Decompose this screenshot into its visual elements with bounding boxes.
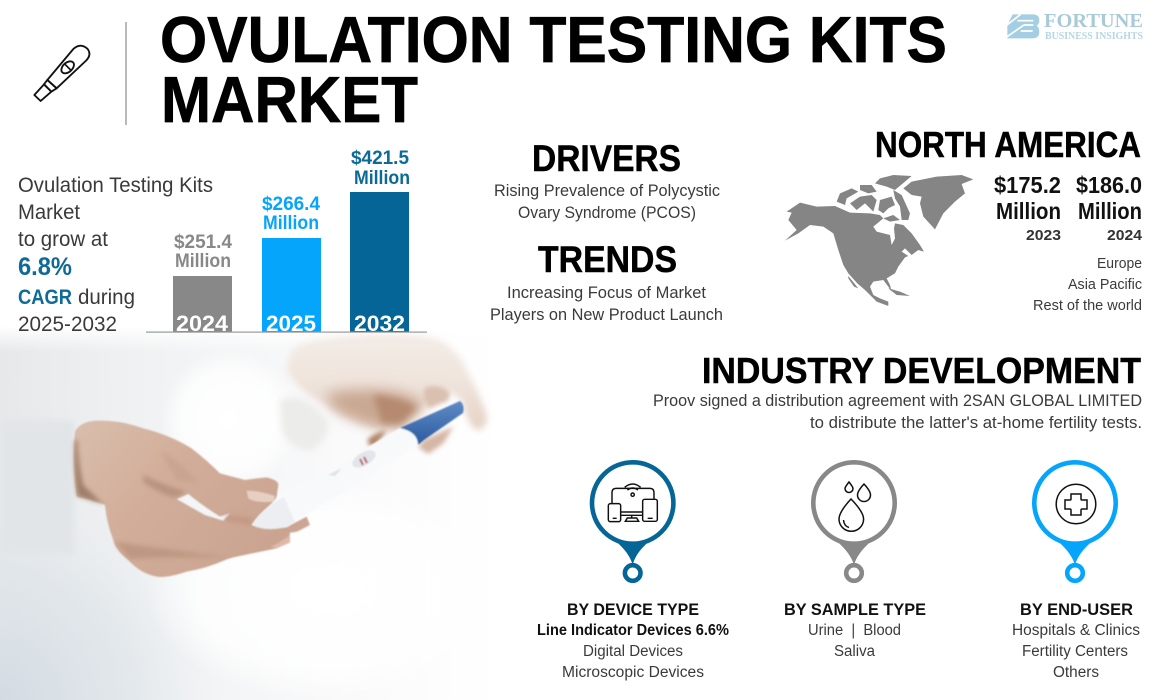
segment: by end-user: BY END-USER <box>1020 600 1133 619</box>
value: 2024: $186.0 <box>1076 172 1142 198</box>
bar: 2025: Million <box>263 213 319 234</box>
bar: 2025 <box>262 194 321 336</box>
pin: by sample type <box>813 462 895 581</box>
segment: by sample type: BY SAMPLE TYPE <box>784 600 926 619</box>
bar: 2024: 2024 <box>176 311 229 336</box>
panel: trends: Players on New Product Launch <box>490 306 723 324</box>
segment: by end-user: Others <box>1053 664 1099 681</box>
panel: drivers: Ovary Syndrome (PCOS) <box>518 204 696 222</box>
panel: industry development: to distribute the latter's at-home fertility tests. <box>810 414 1142 432</box>
value: 2023: $175.2 <box>994 172 1061 198</box>
panel: trends: TRENDS <box>538 239 677 280</box>
title: OVULATION TESTING KITS <box>160 3 947 76</box>
bar: 2032 <box>350 148 410 336</box>
segment: by sample type <box>784 600 926 660</box>
value: 2024 <box>1076 172 1143 244</box>
icon: connected devices <box>608 484 657 522</box>
bar chart: market size by year <box>146 148 427 336</box>
panel: industry development <box>653 350 1142 432</box>
title: MARKET <box>161 63 418 136</box>
photo: hands holding an ovulation test stick <box>0 326 500 700</box>
segment: by device type: Digital Devices <box>583 643 683 660</box>
segment: by end-user <box>1012 600 1140 681</box>
value: 2024: Million <box>1078 198 1142 224</box>
segment: by end-user: Hospitals & Clinics <box>1012 622 1140 639</box>
bar: 2032: Million <box>354 168 410 189</box>
panel: North America <box>875 124 1143 244</box>
list: other regions: Asia Pacific <box>1068 276 1142 293</box>
list: other regions: Rest of the world <box>1033 297 1142 314</box>
panel: drivers: DRIVERS <box>532 138 681 179</box>
bar: 2025: $266.4 <box>262 194 320 215</box>
logo: Fortune Business Insights <box>1006 11 1143 42</box>
segment: by sample type: Urine | Blood <box>808 622 901 639</box>
segment: by sample type: Saliva <box>834 643 875 660</box>
text block: CAGR summary: Ovulation Testing Kits <box>18 174 213 197</box>
value: 2023: Million <box>996 198 1061 224</box>
panel: trends: Increasing Focus of Market <box>507 284 706 302</box>
title <box>160 3 947 136</box>
divider <box>125 22 127 125</box>
list: other regions: Europe <box>1097 255 1142 272</box>
value: 2023 <box>994 172 1061 244</box>
segment: by device type: Microscopic Devices <box>562 664 704 681</box>
test stick <box>252 401 464 529</box>
bar: 2032: 2032 <box>354 311 405 336</box>
map: North America <box>785 175 973 306</box>
pin: by end-user <box>1034 462 1116 581</box>
logo: Fortune Business Insights: BUSINESS INSIGHTS <box>1045 31 1143 42</box>
text block: CAGR summary: during <box>78 286 135 309</box>
icon: medical cross <box>1056 484 1096 524</box>
segment: by device type <box>537 600 729 681</box>
bar: 2024 <box>173 232 232 336</box>
segment: by device type: Line Indicator Devices 6.6% <box>537 622 729 639</box>
hand shading <box>74 440 253 559</box>
text block: CAGR summary: to grow at <box>18 228 108 251</box>
text block: CAGR summary: Market <box>18 201 80 224</box>
value: 2023: 2023 <box>1026 227 1061 244</box>
lower hand <box>74 421 310 577</box>
icon: ovulation test stick <box>34 46 89 101</box>
text block: CAGR summary <box>18 174 213 336</box>
panel: drivers: Rising Prevalence of Polycystic <box>494 182 720 200</box>
panel: industry development: INDUSTRY DEVELOPMENT <box>702 350 1141 391</box>
icon: drops <box>839 482 870 531</box>
bar: 2024: Million <box>175 251 231 272</box>
text block: CAGR summary: 2025-2032 <box>18 313 117 336</box>
text block: CAGR summary: CAGR <box>18 286 72 309</box>
panel: trends <box>490 239 723 324</box>
value: 2024: 2024 <box>1107 227 1143 244</box>
panel: industry development: Proov signed a distribution agreement with 2SAN GLOBAL LIMITED <box>653 392 1142 410</box>
segment: by end-user: Fertility Centers <box>1022 643 1128 660</box>
text block: CAGR summary: 6.8% <box>18 253 72 281</box>
panel: drivers <box>494 138 720 222</box>
segment: by device type: BY DEVICE TYPE <box>567 600 699 619</box>
bar: 2024: $251.4 <box>174 232 232 253</box>
bar: 2025: 2025 <box>266 311 316 336</box>
pin: by device type <box>592 462 673 581</box>
upper hand <box>280 334 487 452</box>
logo: Fortune Business Insights: FORTUNE <box>1044 11 1143 32</box>
bar: 2032: $421.5 <box>351 148 409 169</box>
list: other regions <box>1033 255 1142 314</box>
